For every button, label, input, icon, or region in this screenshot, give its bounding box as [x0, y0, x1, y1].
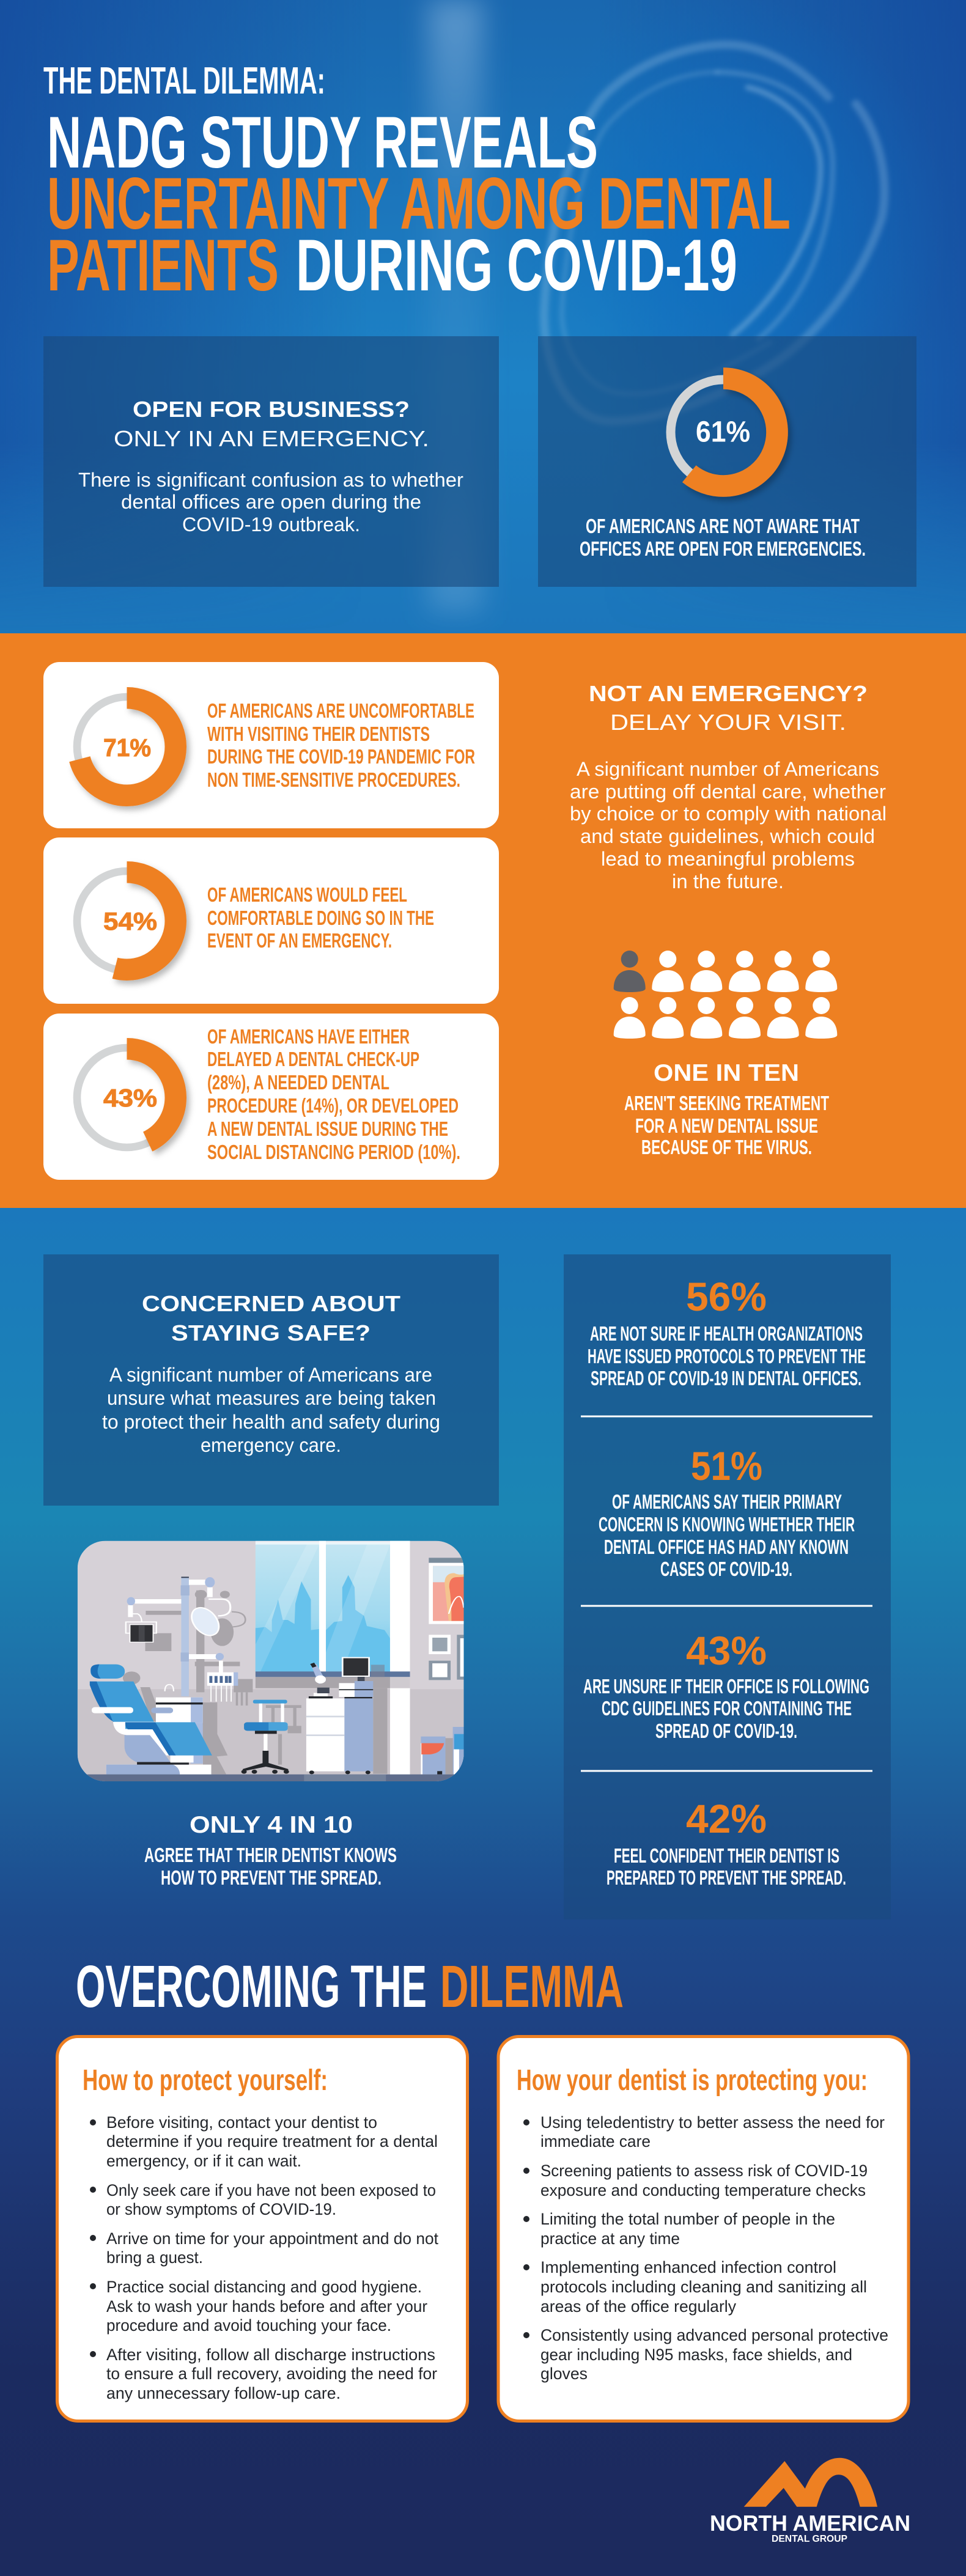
- bullet list: protect yourself: Practice social distancing and good hygiene.: [106, 2278, 422, 2296]
- text: 43 percent: (28%), A NEEDED DENTAL: [207, 1071, 389, 1094]
- text: 43 percent: DELAYED A DENTAL CHECK-UP: [207, 1048, 419, 1070]
- bullet list: dentist protections: gloves: [540, 2364, 588, 2383]
- title: DURING COVID-19: [296, 224, 737, 306]
- bullet list: dentist protections: Using teledentistry to better assess the need for: [540, 2113, 885, 2132]
- text: 43 percent: A NEW DENTAL ISSUE DURING THE: [207, 1117, 448, 1140]
- text: 54 percent: OF AMERICANS WOULD FEEL: [207, 883, 407, 906]
- donut chart: 71%: [77, 697, 177, 797]
- text: open for business body: dental offices are open during the: [121, 491, 421, 513]
- bullet list: dentist protections: Implementing enhanced infection control: [540, 2258, 836, 2276]
- text: open for business body: COVID-19 outbreak.: [182, 513, 360, 535]
- bullet list: protect yourself: After visiting, follow all discharge instructions: [106, 2346, 435, 2364]
- text: 54 percent: COMFORTABLE DOING SO IN THE: [207, 907, 434, 929]
- bullet list: protect yourself: Arrive on time for your appointment and do not: [106, 2229, 438, 2248]
- equipment cabinet: [306, 1657, 373, 1774]
- bullet list: dentist protections: Limiting the total number of people in the: [540, 2210, 835, 2228]
- title: THE DENTAL DILEMMA:: [43, 60, 325, 102]
- logo: north american dental group: [710, 2458, 910, 2544]
- heading: not an emergency: [589, 681, 868, 735]
- heading: overcoming the dilemma: DILEMMA: [440, 1953, 624, 2020]
- logo: north american dental group: NORTH AMERICAN: [710, 2511, 910, 2536]
- bullet list: dentist protections: areas of the office regularly: [540, 2297, 736, 2316]
- panel: statistics column: [564, 1254, 891, 1919]
- heading: concerned: STAYING SAFE?: [171, 1320, 371, 1345]
- heading: open for business: OPEN FOR BUSINESS?: [133, 397, 410, 422]
- text: not an emergency body: in the future.: [672, 870, 784, 892]
- dental chair: [90, 1665, 212, 1775]
- text: concerned body: to protect their health and safety during: [102, 1411, 440, 1433]
- stat: 43 percent: 43%: [686, 1628, 767, 1673]
- callout: one in ten: BECAUSE OF THE VIRUS.: [641, 1136, 812, 1158]
- bullet list: protect yourself: Before visiting, contact your dentist to: [106, 2113, 377, 2132]
- bullet list: protect yourself: or show symptoms of COVID-19.: [106, 2200, 336, 2218]
- title: [43, 60, 791, 306]
- panel: 61 percent: [538, 336, 916, 587]
- stat: 42 percent: FEEL CONFIDENT THEIR DENTIST IS: [614, 1844, 839, 1867]
- bullet list: protect yourself: to ensure a full recovery, avoiding the need for: [106, 2364, 437, 2383]
- caption: only 4 in 10: AGREE THAT THEIR DENTIST KNOWS: [144, 1844, 397, 1866]
- text: concerned body: emergency care.: [201, 1434, 341, 1456]
- text: 43 percent: PROCEDURE (14%), OR DEVELOPED: [207, 1094, 459, 1117]
- text: 54 percent: [207, 883, 434, 952]
- illustration: dental office: [78, 1541, 465, 1781]
- stat: 51 percent: CASES OF COVID-19.: [660, 1558, 792, 1580]
- donut chart: 71%: 71%: [103, 734, 151, 762]
- background: orange band: [0, 633, 966, 1208]
- card: 43 percent: [43, 1014, 499, 1180]
- text: 43 percent: SOCIAL DISTANCING PERIOD (10%).: [207, 1141, 460, 1163]
- bullet list: dentist protections: Consistently using advanced personal protective: [540, 2326, 888, 2344]
- text: 71 percent: OF AMERICANS ARE UNCOMFORTABLE: [207, 699, 474, 722]
- text: 43 percent: OF AMERICANS HAVE EITHER: [207, 1025, 410, 1048]
- text: not an emergency body: lead to meaningful problems: [601, 848, 855, 870]
- text: not an emergency body: [570, 758, 887, 892]
- donut chart: 61%: [669, 378, 777, 486]
- bullet list: dentist protections: gear including N95 masks, face shields, and: [540, 2346, 852, 2364]
- text: 71 percent: NON TIME-SENSITIVE PROCEDURES.: [207, 768, 460, 791]
- bullet list: dentist protections: protocols including cleaning and sanitizing all: [540, 2278, 867, 2296]
- background: lower blue section: [0, 1208, 966, 2576]
- stat: 42 percent: [607, 1796, 846, 1889]
- text: not an emergency body: are putting off dental care, whether: [570, 781, 886, 803]
- donut chart: 54%: 54%: [103, 907, 157, 935]
- callout: one in ten: FOR A NEW DENTAL ISSUE: [635, 1114, 818, 1137]
- text: concerned body: [102, 1364, 440, 1456]
- text: 71 percent: DURING THE COVID-19 PANDEMIC FOR: [207, 745, 475, 768]
- heading: how to protect yourself: How to protect yourself:: [83, 2064, 328, 2097]
- stat: 42 percent: 42%: [686, 1796, 767, 1841]
- text: open for business body: There is significant confusion as to whether: [78, 469, 463, 491]
- card: 54 percent: [43, 837, 499, 1004]
- stat: 51 percent: [599, 1443, 855, 1580]
- stat: 51 percent: 51%: [691, 1443, 762, 1489]
- bullet list: dentist protections: [523, 2113, 888, 2383]
- heading: open for business: [114, 397, 429, 451]
- bullet list: protect yourself: Only seek care if you have not been exposed to: [106, 2181, 436, 2199]
- heading: overcoming the dilemma: OVERCOMING THE: [76, 1953, 427, 2020]
- title: NADG STUDY REVEALS: [47, 101, 598, 183]
- text: 71 percent: WITH VISITING THEIR DENTISTS: [207, 723, 430, 745]
- bullet list: protect yourself: bring a guest.: [106, 2248, 203, 2267]
- card: how your dentist is protecting you: [498, 2037, 909, 2421]
- caption: 61 percent: OF AMERICANS ARE NOT AWARE THAT: [586, 515, 860, 537]
- caption: 61 percent: [580, 515, 866, 560]
- stat: 43 percent: SPREAD OF COVID-19.: [655, 1720, 797, 1742]
- text: not an emergency body: by choice or to comply with national: [570, 803, 887, 825]
- stat: 56 percent: 56%: [686, 1274, 767, 1319]
- panel: open for business: [43, 336, 499, 587]
- callout: one in ten: [624, 1060, 829, 1158]
- heading: concerned: [142, 1291, 400, 1345]
- text: 71 percent: [207, 699, 475, 791]
- panel: concerned about staying safe: [43, 1254, 499, 1506]
- bullet list: dentist protections: practice at any time: [540, 2229, 680, 2248]
- callout: one in ten: ONE IN TEN: [654, 1060, 799, 1086]
- donut chart: 61%: 61%: [696, 416, 750, 449]
- stool: [242, 1700, 289, 1774]
- donut chart: 43%: 43%: [103, 1084, 157, 1112]
- donut chart: 54%: [77, 871, 177, 971]
- sink cabinet: [156, 1685, 203, 1764]
- bullet list: protect yourself: procedure and avoid touching your face.: [106, 2316, 391, 2335]
- bullet list: protect yourself: emergency, or if it can wait.: [106, 2152, 301, 2170]
- heading: not an emergency: DELAY YOUR VISIT.: [610, 710, 846, 735]
- text: 54 percent: EVENT OF AN EMERGENCY.: [207, 929, 392, 952]
- dental light arm: [126, 1577, 238, 1702]
- heading: concerned: CONCERNED ABOUT: [142, 1291, 400, 1316]
- bullet list: protect yourself: any unnecessary follow-up care.: [106, 2384, 341, 2402]
- shadows on the wall: [123, 1590, 454, 1775]
- caption: only 4 in 10: ONLY 4 IN 10: [190, 1812, 353, 1838]
- bullet list: dentist protections: exposure and conducting temperature checks: [540, 2181, 866, 2199]
- bullet list: protect yourself: determine if you require treatment for a dental: [106, 2132, 438, 2151]
- heading: open for business: ONLY IN AN EMERGENCY.: [114, 426, 429, 451]
- caption: only 4 in 10: [144, 1812, 397, 1889]
- title: PATIENTS: [47, 224, 279, 306]
- stat: 43 percent: [583, 1628, 869, 1742]
- stat: 51 percent: OF AMERICANS SAY THEIR PRIMARY: [612, 1490, 842, 1513]
- bullet list: protect yourself: Ask to wash your hands before and after your: [106, 2297, 427, 2316]
- text: not an emergency body: A significant number of Americans: [577, 758, 879, 780]
- text: open for business body: [78, 469, 463, 535]
- text: 43 percent: [207, 1025, 460, 1163]
- waste bins: [421, 1727, 465, 1775]
- text: concerned body: A significant number of Americans are: [109, 1364, 432, 1386]
- bullet list: dentist protections: Screening patients to assess risk of COVID-19: [540, 2162, 868, 2180]
- callout: one in ten: AREN'T SEEKING TREATMENT: [624, 1092, 829, 1114]
- icon: people grid, one person highlighted: [614, 951, 837, 1039]
- donut chart: 43%: [77, 1048, 177, 1147]
- background: top blue section: [0, 0, 966, 633]
- bullet list: dentist protections: immediate care: [540, 2132, 651, 2151]
- card: how to protect yourself: [57, 2037, 467, 2421]
- heading: not an emergency: NOT AN EMERGENCY?: [589, 681, 868, 706]
- stat: 56 percent: [588, 1274, 866, 1389]
- bullet list: protect yourself: [90, 2113, 438, 2402]
- text: not an emergency body: and state guidelines, which could: [580, 825, 875, 847]
- logo: north american dental group: DENTAL GROUP: [772, 2534, 847, 2544]
- caption: only 4 in 10: HOW TO PREVENT THE SPREAD.: [161, 1866, 382, 1889]
- text: concerned body: unsure what measures are being taken: [107, 1387, 436, 1409]
- card: 71 percent: [43, 662, 499, 828]
